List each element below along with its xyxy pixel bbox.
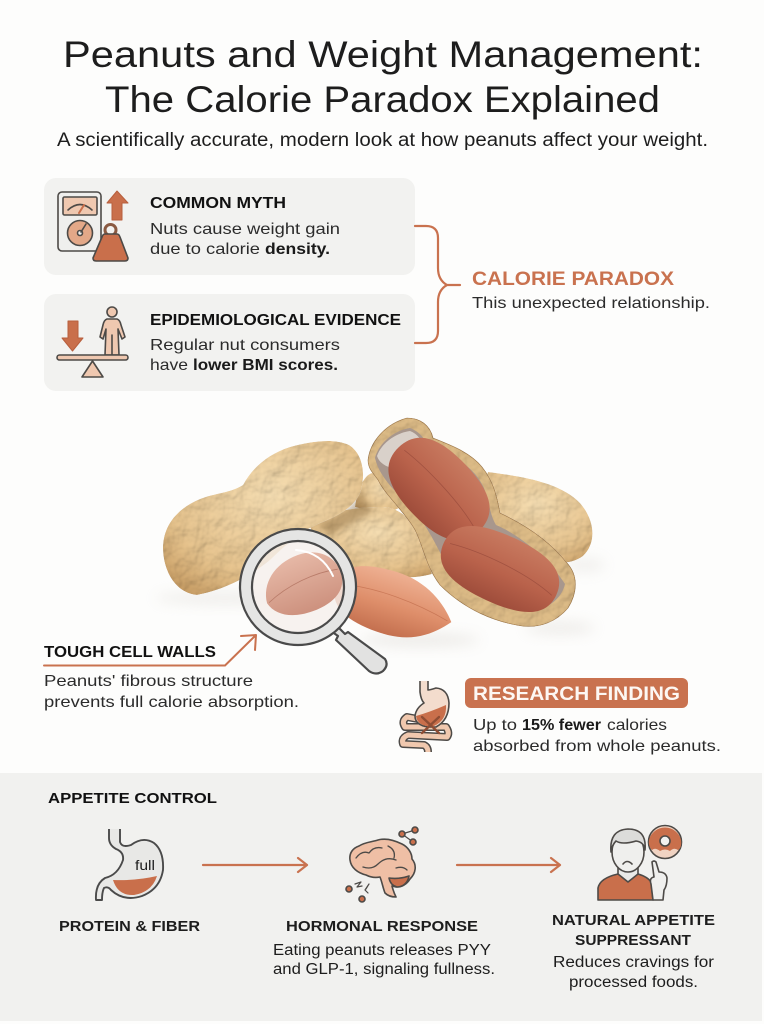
- step: protein and fiber: PROTEIN & FIBER: [59, 918, 200, 935]
- text: myth description: due to calorie: [150, 241, 260, 258]
- text: cell walls description: Peanuts' fibrous structure: [44, 673, 253, 690]
- step: hormonal response: Eating peanuts releases PYY: [273, 942, 491, 959]
- icon: stomach with crossed intestine: [403, 681, 449, 752]
- back right shell: [470, 472, 592, 563]
- icon: person refusing donut: [598, 826, 682, 900]
- heading: common myth: COMMON MYTH: [150, 195, 286, 212]
- back top shell: [355, 473, 405, 515]
- text: evidence description: Regular nut consumers: [150, 337, 340, 354]
- callout: research finding: [465, 678, 721, 755]
- text: myth description: density.: [265, 241, 330, 258]
- callout: tough cell walls: [44, 635, 299, 711]
- peanuts illustration: [155, 418, 605, 652]
- loose kernel: [326, 556, 461, 652]
- panel: epidemiological evidence: [44, 294, 415, 391]
- arrow: to magnifier: [44, 635, 256, 666]
- step: natural appetite suppressant: NATURAL APPETITE: [552, 912, 715, 929]
- text: myth description: [150, 221, 340, 258]
- subtitle: A scientifically accurate, modern look at how peanuts affect your weight.: [57, 130, 708, 151]
- callout: calorie paradox: [472, 269, 710, 312]
- text: research finding description: Up to: [473, 717, 517, 734]
- label pill: [465, 678, 688, 708]
- title: The Calorie Paradox Explained: [105, 79, 660, 120]
- panel: appetite control: [0, 773, 762, 1021]
- text: research finding description: 15% fewer: [522, 717, 601, 734]
- step: hormonal response: and GLP-1, signaling fullness.: [273, 961, 495, 978]
- label pill: RESEARCH FINDING: [473, 684, 680, 705]
- text: cell walls description: [44, 673, 299, 711]
- text: research finding description: [473, 717, 721, 755]
- text: evidence description: [150, 337, 340, 374]
- text: research finding description: absorbed from whole peanuts.: [473, 738, 721, 755]
- icon: full stomach: full: [135, 857, 155, 873]
- callout: calorie paradox: CALORIE PARADOX: [472, 269, 674, 290]
- icon: full stomach: [96, 829, 163, 900]
- callout: tough cell walls: TOUGH CELL WALLS: [44, 644, 216, 661]
- left shell: [163, 441, 363, 595]
- text: cell walls description: prevents full calorie absorption.: [44, 694, 299, 711]
- callout: calorie paradox: This unexpected relationship.: [472, 295, 710, 312]
- icon: gauges, arrow and weight: [58, 191, 128, 261]
- step: hormonal response: HORMONAL RESPONSE: [286, 918, 478, 935]
- open shell: [368, 418, 575, 626]
- arrow: stomach to brain: [203, 858, 307, 872]
- text: evidence description: have: [150, 357, 188, 374]
- icon: balance with person: [57, 307, 128, 377]
- text: evidence description: lower BMI scores.: [193, 357, 338, 374]
- step: natural appetite suppressant: [552, 912, 715, 991]
- title: Peanuts and Weight Management:: [63, 34, 703, 75]
- middle shell: [310, 507, 432, 578]
- shell cavity: [375, 428, 565, 610]
- kernel 1 in shell: [373, 422, 505, 556]
- kernel 2 in shell: [429, 512, 571, 626]
- arrow: brain to person: [457, 858, 560, 872]
- heading: appetite control: APPETITE CONTROL: [48, 790, 217, 807]
- text: myth description: Nuts cause weight gain: [150, 221, 340, 238]
- heading: epidemiological evidence: EPIDEMIOLOGICAL EVIDENCE: [150, 312, 401, 329]
- left shell shadow: [318, 490, 372, 535]
- text: research finding description: calories: [607, 717, 667, 734]
- panel: common myth: [44, 178, 415, 275]
- step: natural appetite suppressant: Reduces cravings for: [553, 954, 714, 971]
- title: [63, 34, 703, 120]
- icon: brain with signals: [346, 827, 418, 902]
- bracket connector: [415, 226, 460, 343]
- step: natural appetite suppressant: SUPPRESSANT: [575, 932, 691, 949]
- step: hormonal response: [273, 918, 495, 978]
- icon: magnifying glass: [240, 529, 387, 674]
- step: natural appetite suppressant: processed foods.: [569, 974, 698, 991]
